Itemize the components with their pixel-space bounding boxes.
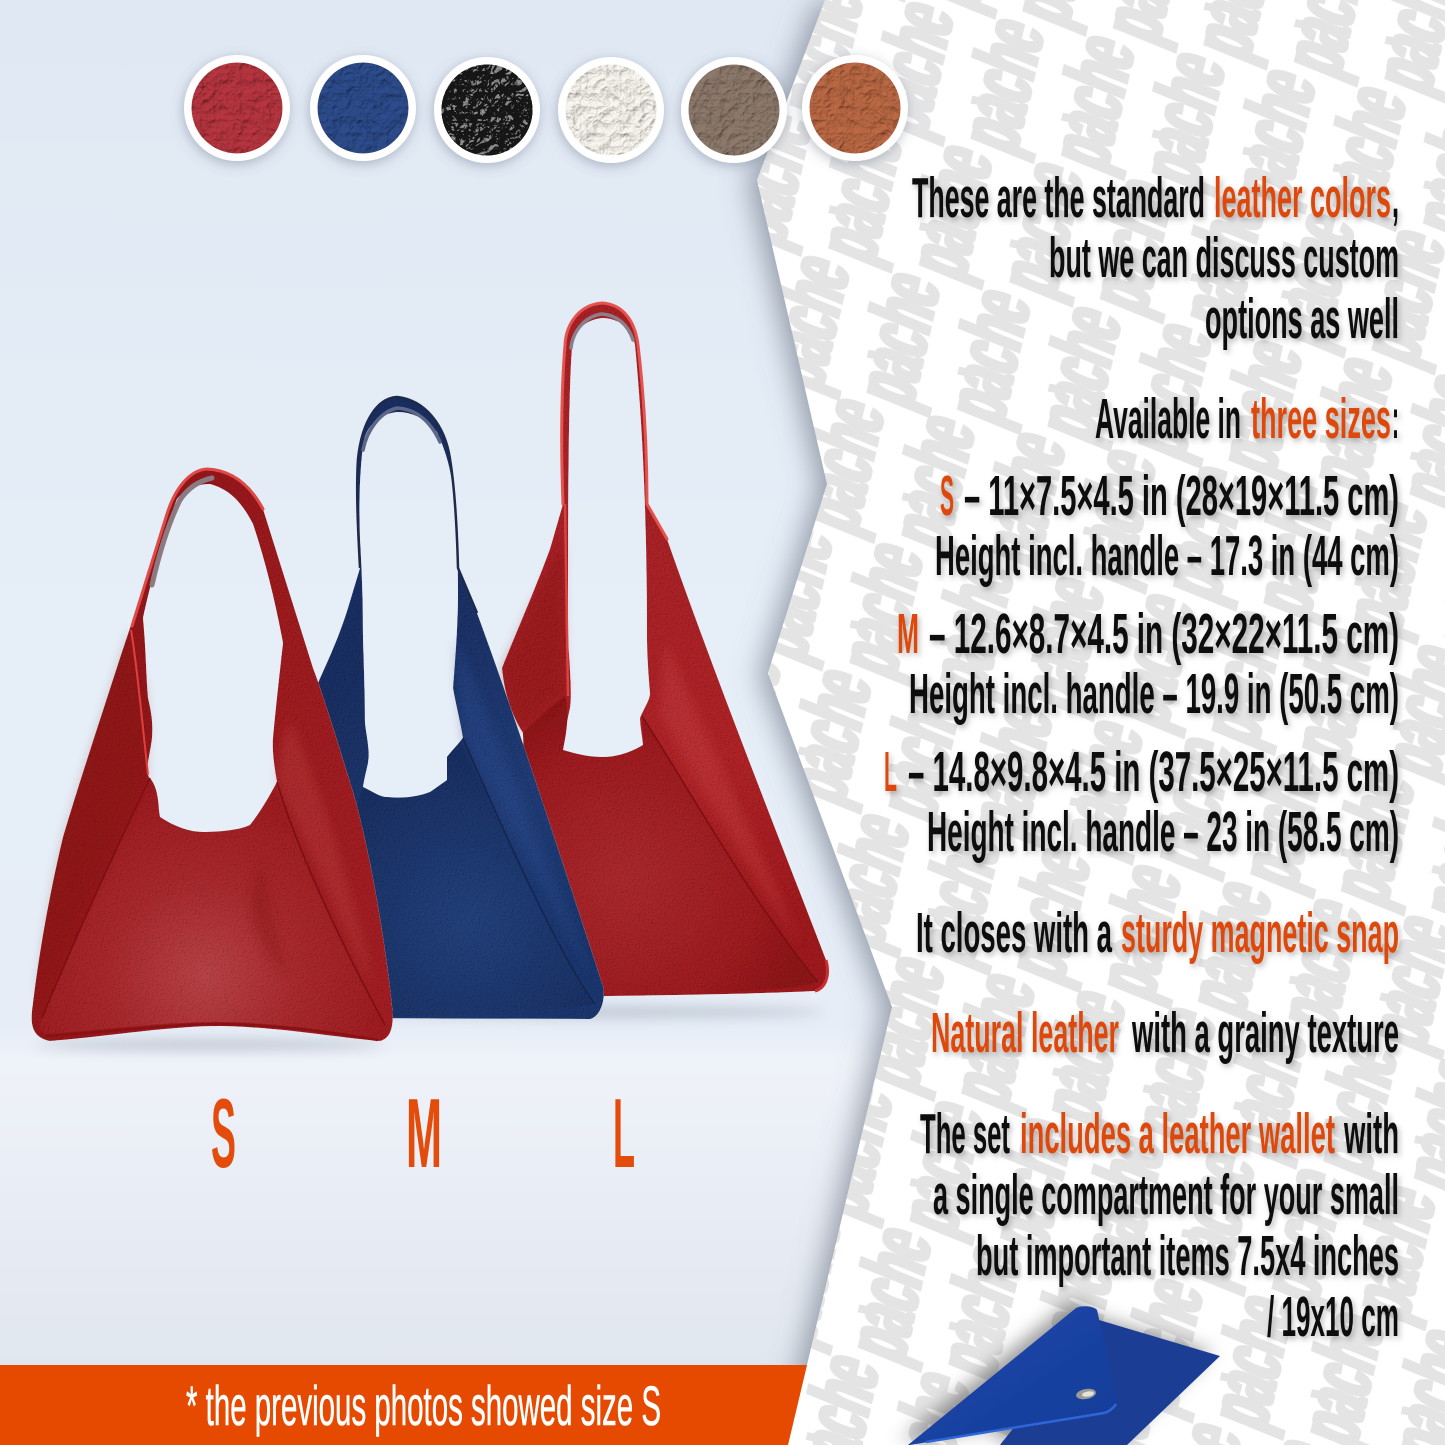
text: wallet: The set	[920, 1102, 1010, 1166]
text: size L: L	[884, 740, 897, 804]
text: closure: It closes with a	[916, 901, 1113, 965]
size labels under bags	[211, 1078, 635, 1188]
swatch: black	[434, 57, 540, 163]
size labels under bags: M	[406, 1078, 442, 1188]
swatch: taupe	[681, 57, 787, 163]
text: size S	[935, 464, 1399, 588]
bag shadows on the platform	[35, 1006, 825, 1051]
text: wallet	[920, 1102, 1399, 1349]
text: size M: M	[897, 602, 919, 666]
panel: white leaf with pache watermark	[757, 0, 1445, 1445]
swatch: blue	[310, 55, 416, 161]
bag: large red (L)	[502, 303, 828, 1000]
bag: small red (S)	[32, 469, 393, 1041]
swatch row: leather colors	[184, 55, 908, 163]
text: ,	[1392, 166, 1399, 230]
swatch: tan	[802, 55, 908, 161]
bag: navy blue (M)	[318, 397, 604, 1019]
text: size M	[897, 602, 1399, 726]
panel: studio photo background	[0, 0, 1000, 1445]
swatch: red	[184, 55, 290, 161]
text: size L	[884, 740, 1399, 864]
size labels under bags: S	[211, 1078, 236, 1188]
text: :	[1392, 387, 1399, 451]
text: leather colors note	[912, 166, 1399, 351]
text column	[884, 166, 1399, 1349]
text: L	[613, 1078, 635, 1188]
text: size S: S	[940, 464, 954, 528]
icon: blue leather wallet	[908, 1306, 1220, 1445]
footer banner	[0, 1365, 807, 1445]
text: sizes heading: Available in	[1095, 387, 1241, 451]
swatch: cream	[558, 57, 664, 163]
text: material: Natural leather	[931, 1001, 1119, 1065]
footer banner: * the previous photos showed size S	[186, 1374, 661, 1437]
